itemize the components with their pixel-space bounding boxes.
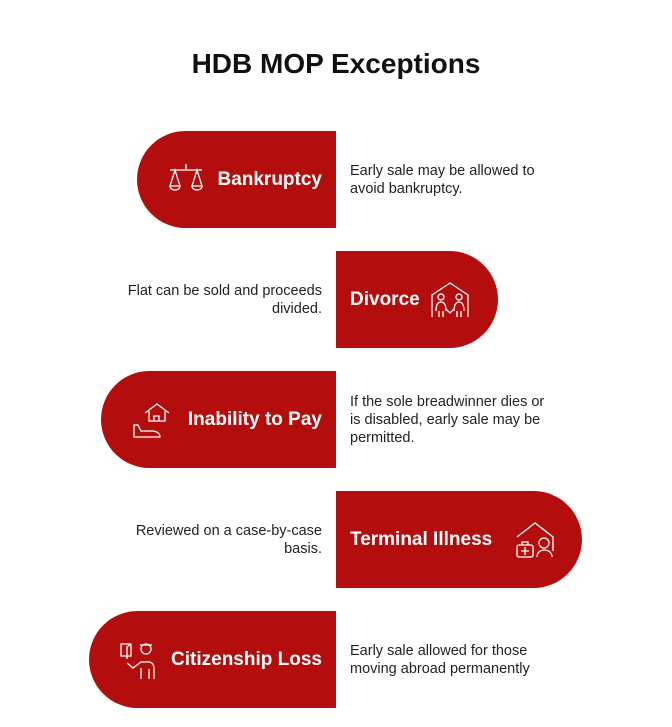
text: inability [350, 394, 544, 446]
icon: medical house [516, 522, 554, 558]
panel: bankruptcy [137, 131, 336, 228]
label: Inability to Pay [188, 409, 322, 430]
text: bankruptcy: avoid bankruptcy. [350, 181, 463, 197]
text: divorce: Flat can be sold and proceeds [128, 283, 322, 299]
text: citizenship: Early sale allowed for those [350, 643, 527, 659]
text: bankruptcy [350, 163, 535, 197]
text: terminal [136, 523, 322, 557]
icon: house in hand [133, 403, 170, 438]
text: terminal: Reviewed on a case-by-case [136, 523, 322, 539]
text: citizenship: moving abroad permanently [350, 661, 530, 677]
panel: citizenship loss [89, 611, 336, 708]
panel: inability to pay [101, 371, 336, 468]
text: inability: If the sole breadwinner dies or [350, 394, 544, 410]
icon: passport person [120, 643, 155, 679]
label: Terminal Illness [350, 529, 492, 550]
text: bankruptcy: Early sale may be allowed to [350, 163, 535, 179]
icon: family house [431, 282, 469, 317]
text: terminal: basis. [284, 541, 322, 557]
text: divorce [128, 283, 322, 317]
label: Divorce [350, 289, 420, 310]
text: citizenship [350, 643, 530, 677]
icon: scales [169, 164, 203, 191]
panel: divorce [336, 251, 498, 348]
text: inability: is disabled, early sale may be [350, 412, 540, 428]
panel: terminal illness [336, 491, 582, 588]
text: divorce: divided. [272, 301, 322, 317]
title: HDB MOP Exceptions [192, 48, 480, 79]
text: inability: permitted. [350, 430, 414, 446]
label: Citizenship Loss [171, 649, 322, 670]
label: Bankruptcy [217, 169, 322, 190]
